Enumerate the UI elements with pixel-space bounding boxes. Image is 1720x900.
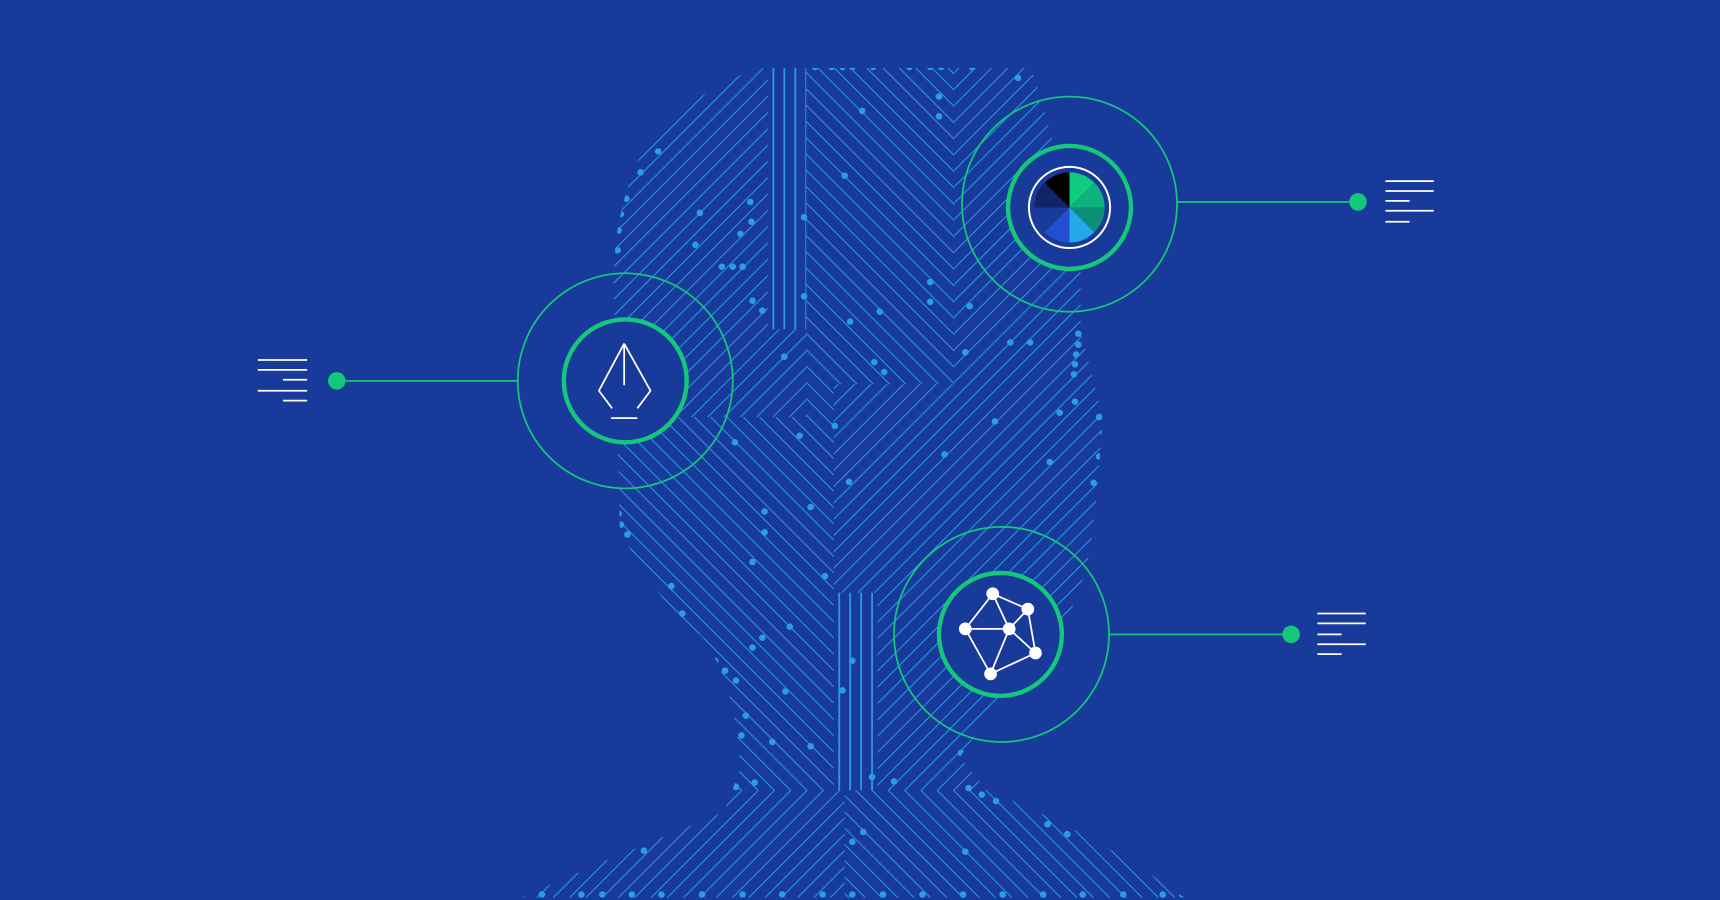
node: pen tool (left) [518, 273, 733, 488]
node: network (bottom) [894, 527, 1109, 742]
icon: pen nib [599, 344, 650, 418]
node: pie chart (top right) [962, 97, 1177, 312]
text lines bottom [1317, 614, 1366, 654]
icon: network graph [960, 588, 1041, 679]
text lines left [258, 360, 307, 401]
icon: pie chart [1034, 172, 1105, 243]
connector top right [1177, 193, 1367, 211]
connector left [328, 372, 518, 390]
text lines top right [1385, 181, 1434, 222]
connector bottom [1110, 626, 1300, 643]
circuit head silhouette [516, 55, 1196, 900]
